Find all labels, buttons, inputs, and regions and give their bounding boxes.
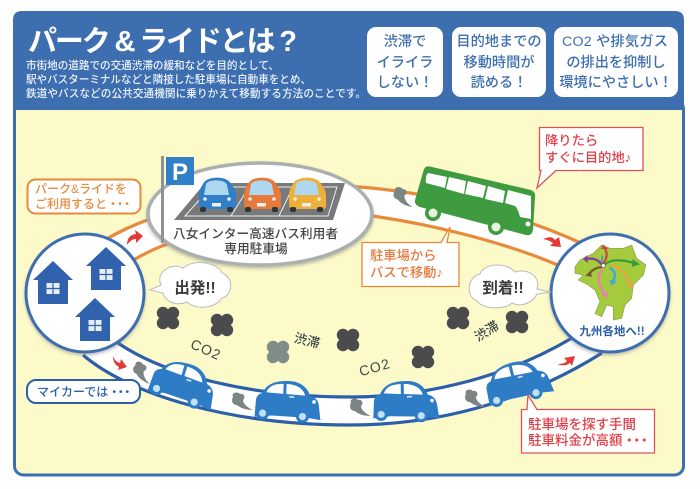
- parking name: 専用駐車場: [224, 241, 288, 256]
- callout: parking hassle and cost: 駐車料金が高額・・・: [528, 432, 646, 448]
- parking sign: [161, 156, 194, 243]
- callout: bus from car park: バスで移動♪: [370, 264, 443, 280]
- intro text: [26, 59, 366, 100]
- benefit card: predictable time: 移動時間が: [464, 54, 534, 71]
- destination circle: [551, 234, 669, 352]
- callout: bus from car park: [362, 227, 459, 286]
- icon: house left: [33, 261, 73, 304]
- upper road: park and ride: [105, 186, 585, 266]
- congestion and CO2 labels: CO2: [357, 355, 392, 379]
- callout: my car: [27, 380, 140, 403]
- benefit card: no traffic stress: [367, 27, 443, 97]
- congestion and CO2 labels: [188, 318, 502, 379]
- callout: parking hassle and cost: [522, 395, 654, 453]
- main yellow panel: [14, 100, 684, 475]
- parked blue car: [199, 178, 236, 212]
- benefit card: eco friendly: CO2 や排気ガス: [562, 34, 668, 50]
- exhaust clouds: [157, 307, 528, 368]
- callout: my car: マイカーでは・・・: [37, 385, 129, 399]
- arrival bubble: [469, 265, 551, 308]
- parking spaces: [174, 183, 345, 220]
- benefit card: predictable time: [452, 27, 546, 97]
- callout: parking hassle and cost: 駐車場を探す手間: [528, 416, 636, 432]
- parking name: 八女インター高速バス利用者: [173, 226, 338, 241]
- parked orange car: [244, 178, 281, 212]
- benefit card: no traffic stress: イライラ: [377, 55, 433, 71]
- callout: get off near destination: 降りたら: [545, 132, 598, 148]
- callout: get off near destination: [537, 128, 643, 188]
- benefit card: eco friendly: 環境にやさしい！: [559, 75, 673, 91]
- callout: park and ride: パーク&ライドを: [35, 182, 127, 196]
- callout: get off near destination: すぐに目的地♪: [545, 150, 631, 165]
- arrival bubble: 到着!!: [482, 278, 524, 297]
- benefit card: no traffic stress: しない！: [377, 75, 433, 91]
- parking lot oval: [148, 163, 372, 265]
- green bus: [415, 166, 535, 235]
- icon: house upper right: [86, 247, 126, 290]
- benefit card: eco friendly: [554, 27, 678, 97]
- benefit card: predictable time: 読める！: [471, 74, 527, 91]
- benefit card: predictable time: 目的地までの: [456, 34, 542, 50]
- exhaust puffs: [130, 186, 486, 416]
- my cars in traffic: [146, 354, 555, 424]
- bus wheels: [425, 205, 530, 235]
- header band: [13, 11, 684, 110]
- parking sign: P: [172, 159, 188, 186]
- departure bubble: [150, 263, 231, 307]
- callout: park and ride: [28, 180, 140, 214]
- icon: house bottom: [75, 298, 115, 341]
- title: パーク & ライドとは ?: [28, 26, 297, 58]
- home circle: [26, 234, 144, 352]
- congestion and CO2 labels: 渋滞: [472, 318, 502, 344]
- intro text: 市街地の道路での交通渋滞の緩和などを目的として、: [26, 59, 279, 72]
- parking name: [173, 226, 338, 256]
- parked yellow car: [289, 178, 326, 212]
- map of Kyushu with arrows: [575, 244, 646, 320]
- callout: bus from car park: 駐車場から: [370, 247, 436, 263]
- departure bubble: 出発!!: [174, 279, 216, 297]
- destination label: 九州各地へ!!: [579, 324, 645, 338]
- flow arrows: [113, 230, 575, 370]
- callout: park and ride: ご利用すると・・・: [35, 196, 129, 211]
- congestion and CO2 labels: 渋滞: [293, 330, 322, 351]
- lower road: my car: [83, 338, 602, 425]
- bus windows: [426, 173, 531, 219]
- intro text: 鉄道やバスなどの公共交通機関に乗りかえて移動する方法のことです。: [26, 87, 366, 100]
- benefit card: eco friendly: の排出を抑制し: [566, 55, 666, 71]
- benefit card: no traffic stress: 渋滞で: [384, 34, 426, 50]
- intro text: 駅やバスターミナルなどと隣接した駐車場に自動車をとめ、: [26, 73, 311, 86]
- congestion and CO2 labels: CO2: [188, 336, 224, 363]
